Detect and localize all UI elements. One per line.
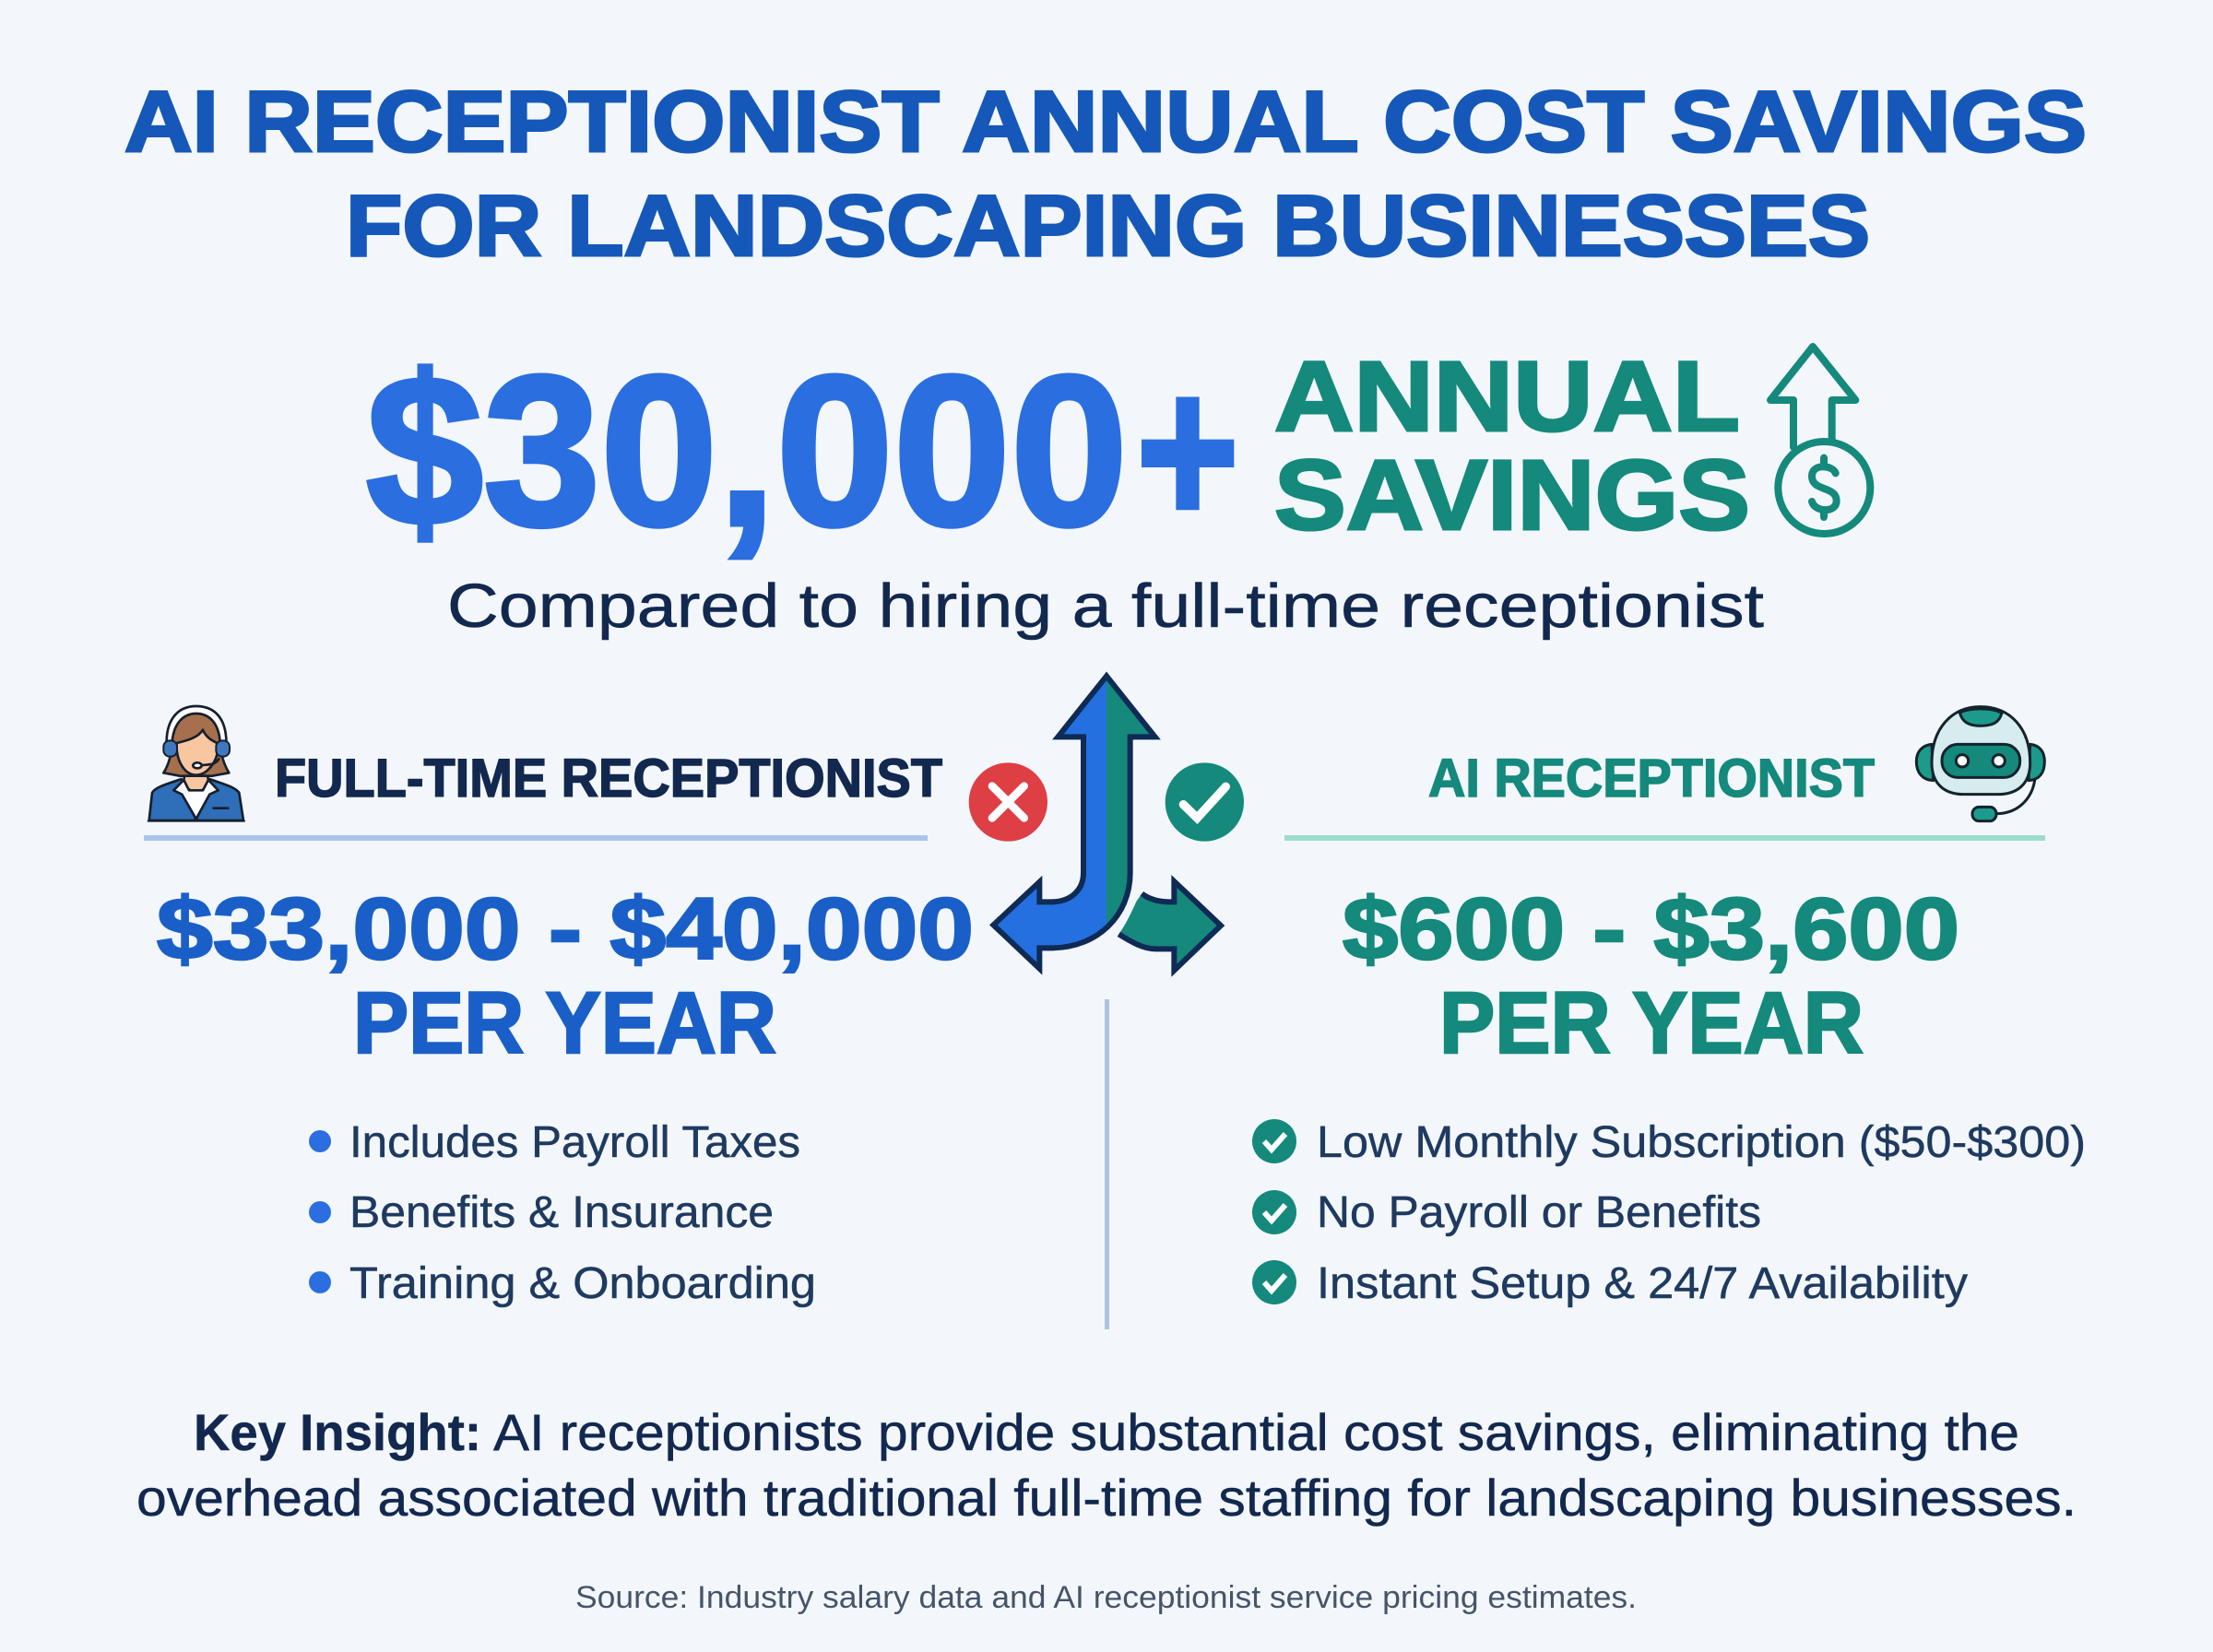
checklist: Instant Setup & 24/7 Availability — [1317, 1259, 1968, 1308]
key insight: AI receptionists provide substantial cost savings, eliminating the — [493, 1403, 2019, 1461]
key insight: overhead associated with traditional full-time staffing for landscaping businesses. — [136, 1469, 2077, 1527]
price — [1343, 880, 1959, 1072]
title — [124, 73, 2087, 274]
headline savings figure: $30,000 — [366, 332, 1128, 571]
price: PER YEAR — [353, 974, 776, 1072]
headline savings figure: + — [1136, 332, 1239, 571]
key insight — [136, 1403, 2077, 1527]
center divider — [1105, 999, 1109, 1329]
check badge — [1166, 762, 1244, 842]
checklist: No Payroll or Benefits — [1317, 1188, 1761, 1237]
source note: Source: Industry salary data and AI receptionist service pricing estimates. — [575, 1580, 1637, 1615]
panel: AI receptionist — [1252, 707, 2086, 1308]
price — [157, 880, 974, 1072]
subtitle: Compared to hiring a full-time receptionist — [447, 572, 1764, 641]
green right branch — [1118, 881, 1221, 971]
checklist: Low Monthly Subscription ($50-$300) — [1317, 1118, 2086, 1167]
key insight: Key Insight: — [194, 1403, 481, 1461]
price: $600 - $3,600 — [1343, 880, 1959, 978]
icon: robot — [1916, 707, 2044, 821]
heading: FULL-TIME RECEPTIONIST — [275, 749, 942, 808]
bullet list: Includes Payroll Taxes — [349, 1118, 800, 1167]
bullet list: Benefits & Insurance — [349, 1188, 774, 1237]
bullet list: Training & Onboarding — [349, 1259, 816, 1308]
panel: full-time receptionist — [144, 706, 974, 1308]
checklist — [1252, 1118, 2086, 1308]
J arrow — [993, 676, 1155, 969]
underline — [1284, 835, 2045, 841]
annual savings label: ANNUAL — [1274, 340, 1740, 452]
heading: AI RECEPTIONIST — [1428, 749, 1875, 808]
icon: receptionist — [148, 706, 244, 821]
annual savings label: SAVINGS — [1274, 439, 1750, 550]
cross badge — [969, 762, 1047, 842]
icon: split arrow with cross and check — [969, 676, 1244, 971]
underline — [144, 835, 928, 841]
price: PER YEAR — [1439, 974, 1864, 1072]
icon: arrow up with dollar coin — [1770, 347, 1870, 534]
title: AI RECEPTIONIST ANNUAL COST SAVINGS — [124, 73, 2087, 170]
annual savings label — [1274, 340, 1750, 550]
title: FOR LANDSCAPING BUSINESSES — [346, 177, 1870, 274]
price: $33,000 - $40,000 — [157, 880, 974, 978]
bullet list — [309, 1118, 816, 1308]
